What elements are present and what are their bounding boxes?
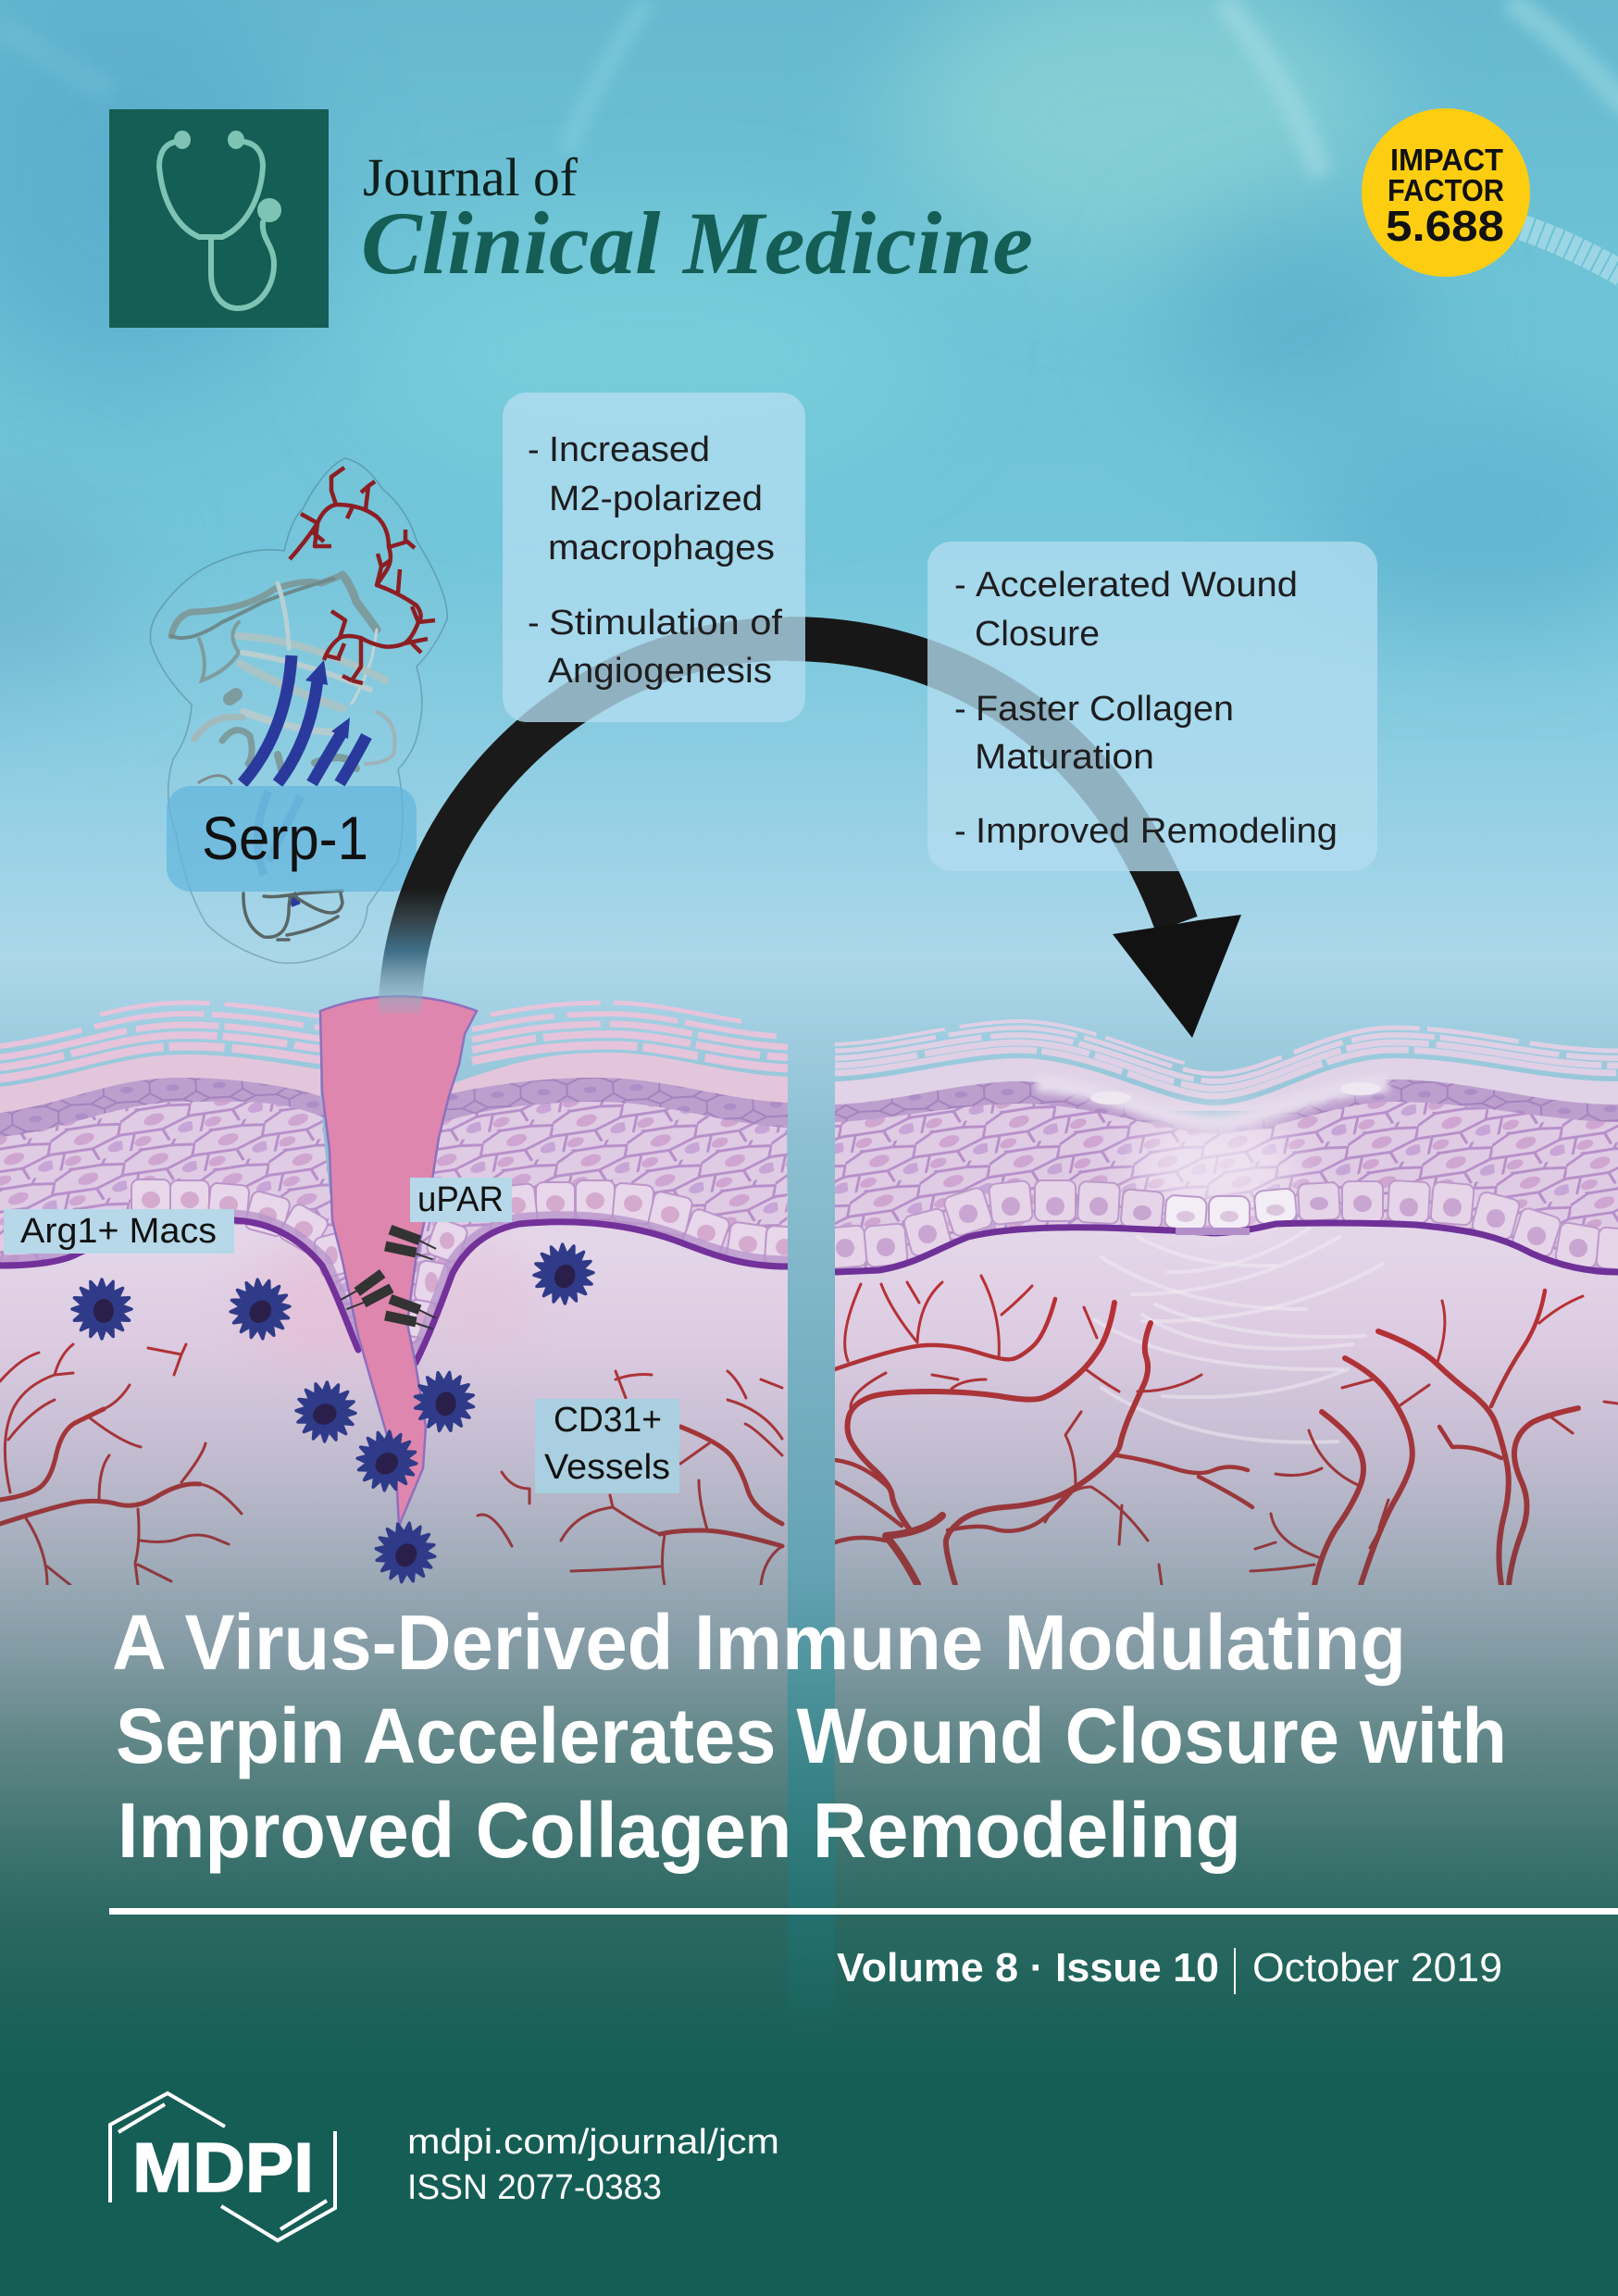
volume and issue line: October 2019 [1252, 1945, 1502, 1990]
text box: wound closure outcomes: - [954, 566, 966, 605]
text box: M2 macrophages and angiogenesis [503, 393, 805, 722]
label: CD31+ Vessels: CD31+ [554, 1401, 662, 1440]
bottom gradient panels [0, 1585, 1618, 2296]
red chain [290, 468, 435, 683]
gray ribbons [171, 575, 395, 783]
label: CD31+ Vessels [535, 1399, 679, 1493]
text box: wound closure outcomes: Closure [975, 615, 1100, 654]
blue strands [243, 655, 367, 905]
text box: wound closure outcomes [927, 542, 1377, 871]
text box: M2 macrophages and angiogenesis: - [528, 430, 540, 469]
MDPI logo [110, 2093, 335, 2240]
impact factor badge: FACTOR [1388, 173, 1504, 207]
text box: M2 macrophages and angiogenesis: Stimulation of [549, 604, 782, 643]
stratum corneum strands [835, 1021, 1618, 1111]
left skin panel: wound [0, 996, 805, 1585]
text box: wound closure outcomes: - [954, 690, 966, 729]
uPAR receptors [338, 1225, 439, 1334]
curved arrow [400, 639, 1241, 1038]
icon: stethoscope [159, 133, 279, 308]
text box: wound closure outcomes: - [954, 812, 966, 851]
epidermis [835, 1079, 1618, 1272]
impact factor badge: 5.688 [1386, 202, 1504, 250]
journal website and ISSN: mdpi.com/journal/jcm [407, 2123, 779, 2162]
impact factor badge [1362, 108, 1530, 277]
journal title [361, 147, 1033, 293]
volume and issue line [837, 1945, 1502, 1994]
journal title: Clinical Medicine [361, 193, 1033, 293]
blood vessels: right panel [835, 1276, 1618, 1585]
text box: M2 macrophages and angiogenesis: M2-polarized [549, 480, 763, 518]
label: Arg1+ Macs: Arg1+ Macs [20, 1212, 217, 1251]
text box: M2 macrophages and angiogenesis: - [528, 604, 540, 643]
MDPI logo: MDPI [132, 2128, 314, 2206]
text box: wound closure outcomes: Improved Remodeling [976, 812, 1338, 851]
journal website and ISSN: ISSN 2077-0383 [407, 2168, 662, 2207]
label: uPAR: uPAR [417, 1180, 504, 1219]
text box: M2 macrophages and angiogenesis: Angiogenesis [548, 652, 772, 691]
epidermis left [0, 1078, 352, 1318]
macrophages [72, 1236, 602, 1593]
protein structure illustration: Serp-1 [150, 458, 447, 963]
text box: M2 macrophages and angiogenesis: Increased [549, 430, 710, 469]
lower loops [243, 891, 342, 940]
journal logo square with stethoscope [109, 109, 329, 328]
scar region [1131, 1109, 1298, 1224]
text box: wound closure outcomes: Accelerated Wound [976, 566, 1298, 605]
label: Serp-1: Serp-1 [202, 804, 368, 872]
dermis [835, 1194, 1618, 1585]
volume and issue line: Volume 8 · Issue 10 [837, 1945, 1219, 1990]
stratum corneum strands [0, 1003, 788, 1118]
label: Serp-1 [167, 786, 417, 892]
basal cells [131, 1179, 805, 1340]
label: CD31+ Vessels: Vessels [544, 1448, 670, 1487]
surface outline [150, 458, 447, 963]
collagen arcs [1094, 1229, 1383, 1442]
headline: A Virus-Derived Immune Modulating [112, 1599, 1406, 1686]
text box: wound closure outcomes: Maturation [975, 738, 1154, 777]
basement membrane [0, 1215, 788, 1363]
wound [320, 996, 477, 1526]
right skin panel: healed wound [823, 1021, 1618, 1585]
journal website and ISSN [407, 2123, 779, 2207]
impact factor badge: IMPACT [1390, 143, 1503, 177]
basal cells [823, 1180, 1618, 1271]
headline: Improved Collagen Remodeling [118, 1787, 1241, 1874]
headline: Serpin Accelerates Wound Closure with [116, 1692, 1507, 1779]
headline [112, 1599, 1507, 1874]
text box: M2 macrophages and angiogenesis: macrophages [548, 529, 775, 568]
blood vessels: left panel [0, 1344, 782, 1585]
journal title: Journal of [363, 147, 579, 207]
dermis [0, 1194, 788, 1585]
basement membrane [835, 1228, 1214, 1272]
divider rule [109, 1908, 1618, 1915]
epidermis right [407, 1078, 788, 1363]
text box: wound closure outcomes: Faster Collagen [976, 690, 1234, 729]
